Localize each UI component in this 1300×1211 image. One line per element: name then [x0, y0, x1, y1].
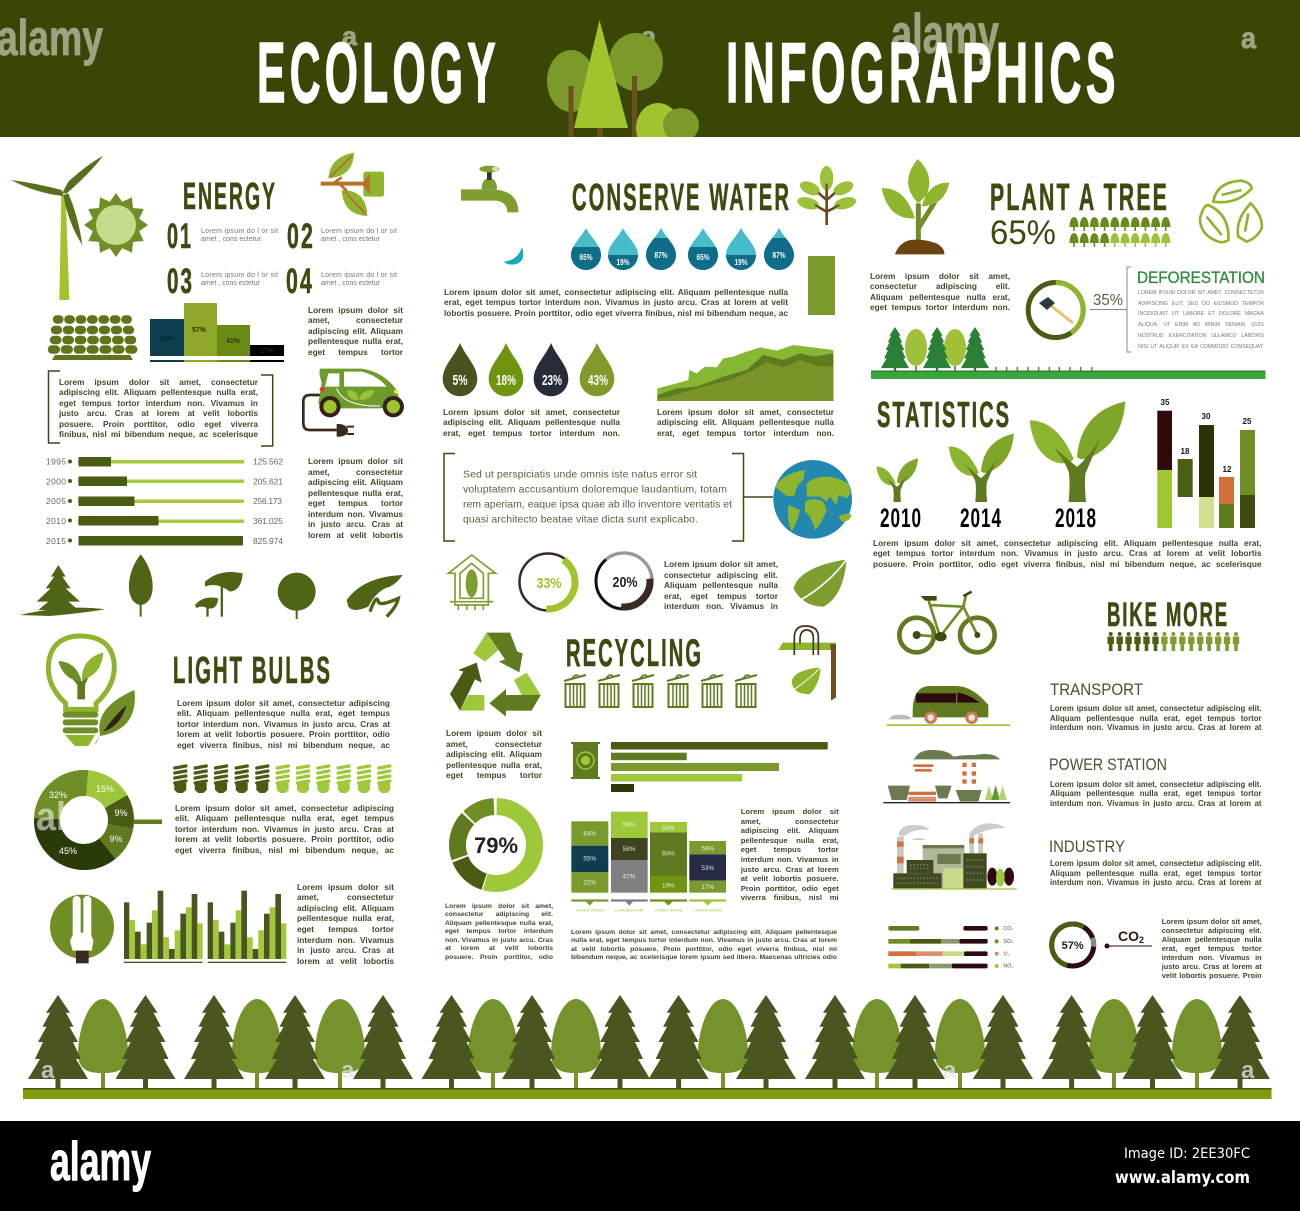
- stacked bar chart: 53%: [662, 825, 675, 832]
- chart: ring 57%: 57%: [1062, 940, 1084, 952]
- text block: Aliquam pellentesque nulla erat, eget tempus tortor: [1050, 789, 1262, 798]
- text block: amet, consectetur: [308, 315, 403, 325]
- text block: consectetur adipiscing elit.: [664, 570, 778, 580]
- stacked bar chart: 60%: [662, 850, 675, 857]
- panel: conserve water: [443, 166, 857, 620]
- text block: Lorem ipsum dolor sit: [308, 456, 403, 466]
- text block: [446, 728, 542, 783]
- panel: energy: [11, 153, 404, 619]
- text block: adipiscing elit. Aliquam pellentesque nulla: [443, 417, 620, 427]
- text block: Lorem ipsum dolor sit amet, consectetur: [443, 407, 620, 417]
- forest strip: a: [943, 1057, 957, 1084]
- text block: at velit lobortis posuere.: [741, 874, 839, 883]
- chart: small water drops: 65%: [696, 253, 710, 262]
- icon: recycling leaves: [1200, 181, 1262, 242]
- horizontal bars by year: 361.025: [253, 516, 283, 526]
- stacked bar chart: LOREM IPSUM: [576, 908, 604, 913]
- text block: interdum non. Vivamus in justo arcu. Cras at lorem at: [1050, 723, 1262, 732]
- bracket quote: Sed ut perspiciatis unde omnis iste natus error sit: [463, 468, 697, 480]
- text block: Lorem ipsum dolor sit amet,: [664, 559, 778, 569]
- numbered list: [167, 217, 397, 301]
- horizontal bars by year: 256.173: [253, 496, 282, 506]
- stacked bar chart: 59%: [623, 822, 636, 829]
- text block: velit lobortis posuere. Proin: [1162, 971, 1262, 980]
- area chart: [657, 345, 833, 401]
- text block: lorem at velit lobortis: [308, 530, 403, 540]
- text block: interdum non. Vivamus in: [741, 855, 839, 864]
- stacked bar chart: 19%: [662, 882, 675, 889]
- text block: justo arcu. Cras at lorem at: [1162, 962, 1262, 971]
- numbered list: amet , cons ectetur: [201, 280, 261, 287]
- stacked bar chart: 64%: [583, 831, 596, 838]
- text block: Aliquam pellentesque nulla: [664, 580, 778, 590]
- text block: interdum non. Vivamus in justo arcu. Cras at lorem at: [1050, 878, 1262, 887]
- numbered list: Lorem ipsum do l or sit: [201, 228, 278, 235]
- chart: donut: 32%: [49, 790, 67, 800]
- horizontal bars by year: 1995: [46, 456, 66, 466]
- label: CO2 with connector: [1104, 928, 1152, 948]
- numbered list: Lorem ipsum do l or sit: [201, 272, 278, 279]
- chart: emissions bars: NO₂: [1003, 964, 1014, 970]
- text block: adipiscing elit. Aliquam: [446, 749, 542, 759]
- icon: barrel: [571, 742, 600, 779]
- text block: amet, consectetur: [297, 892, 394, 902]
- stacked bar chart: [571, 812, 726, 913]
- text block: erat, eget tempus tortor interdum non. Vivamus in justo arcu. Cras at lorem at velit: [444, 297, 788, 307]
- numbered list: 03: [167, 262, 194, 301]
- text block: pellentesque nulla erat,: [741, 836, 839, 845]
- stacked bar chart: LOREM IPSUM: [694, 908, 722, 913]
- text block: [664, 559, 778, 614]
- text block: adipiscing elit. Aliquam: [308, 326, 403, 336]
- text block: in justo arcu. Cras at: [297, 945, 394, 955]
- heading: transport: TRANSPORT: [1050, 680, 1143, 699]
- text block: consectetur adipiscing elit.: [1162, 926, 1262, 935]
- chart: small water drops: 19%: [616, 258, 630, 267]
- text block: Lorem ipsum dolor sit amet, consectetur: [657, 407, 834, 417]
- numbered list: 01: [167, 217, 193, 256]
- deforestation text: NISI UT ALIQUIP EX EA COMMODO CONSEQUAT.: [1138, 344, 1264, 350]
- bracket quote: rem aperiam, eaque ipsa quae ab illo inventore veritatis et: [463, 498, 732, 510]
- numbered list: 02: [287, 217, 315, 256]
- deforestation text: LOREM IPSUM DOLOR SIT AMET, CONSECTETUR: [1138, 290, 1264, 296]
- deforestation text: ADIPISCING ELIT, SED DO EIUSMOD TEMPOR: [1138, 301, 1264, 307]
- bracket text: justo arcu. Cras at lorem at velit lobortis: [59, 408, 258, 418]
- stacked bar chart: 47%: [623, 874, 636, 881]
- stacked bar chart: 59%: [701, 845, 714, 852]
- chart: donut: al: [36, 795, 66, 839]
- icon: factory: [892, 823, 1017, 890]
- icons: tree silhouettes: [20, 554, 403, 619]
- watermark top: alamy: [0, 10, 103, 66]
- heading: conserve water: CONSERVE WATER: [572, 177, 791, 219]
- chart: big drops: 18%: [496, 372, 516, 389]
- text block: Aliquam pellentesque nulla: [1162, 935, 1262, 944]
- chart: emissions bars: [888, 926, 1014, 970]
- text block: adipiscing elit. Aliquam: [308, 477, 403, 487]
- chart: emissions bars: O₃: [1003, 951, 1010, 957]
- text block: interdum non. Vivamus in: [664, 601, 778, 611]
- text block: Lorem ipsum dolor sit amet, consectetur adipiscing elit. Aliquam pellentesque: [571, 929, 837, 936]
- icon: wind turbine: [11, 156, 103, 300]
- label: CO2 with connector: 2: [1139, 935, 1144, 945]
- icon: eco house: [448, 555, 496, 610]
- text block: Lorem ipsum dolor sit: [741, 807, 839, 816]
- horizontal bars by year: 2005: [46, 496, 66, 506]
- panel: recycling: [442, 626, 839, 965]
- chart: big drops: 23%: [542, 372, 562, 389]
- numbered list: amet , cons ectetur: [201, 236, 262, 243]
- text block: eget viverra finibus, nisl mi bibendum neque, ac: [177, 740, 390, 750]
- text block: Aliquam pellentesque nulla erat, eget tempus tortor: [1050, 714, 1262, 723]
- text block: lorem at velit lobortis: [297, 956, 394, 966]
- bar chart: statistics: 18: [1181, 447, 1190, 456]
- horizontal bars by year: 2010: [46, 516, 66, 526]
- text block: [1050, 859, 1262, 889]
- text block: at velit lobortis posuere. Proin porttitor, odio eget viverra finibus, nisl mi: [571, 946, 837, 953]
- text block: nulla erat, eget tempus tortor interdum non. Vivamus in justo arcu. Cras at lorem: [571, 937, 837, 944]
- bar charts: [124, 891, 286, 963]
- pictogram: bins: [564, 675, 757, 707]
- heading: deforestation: DEFORESTATION: [1137, 268, 1265, 287]
- text block: [1050, 780, 1262, 810]
- stacked bar chart: LOREM IPSUM: [615, 908, 643, 913]
- stat: 35% with connector: 35%: [1093, 292, 1123, 309]
- icon: branch with leaves: [321, 153, 384, 216]
- chart: small water drops: [571, 228, 794, 270]
- panel: light bulbs: [32, 636, 394, 968]
- text block: erat, eget tempus tortor interdum non.: [657, 428, 834, 438]
- text block: Lorem ipsum dolor sit amet,: [1162, 917, 1262, 926]
- chart: big drops: 5%: [452, 372, 468, 389]
- chart: donut: 9%: [109, 834, 123, 844]
- deforestation text: ALIQUA. UT ENIM AD MINIM VENIAM, QUIS: [1138, 322, 1264, 328]
- chart: donut 79%: [442, 791, 550, 899]
- text block: [445, 903, 553, 965]
- chart: donut: 15%: [96, 784, 114, 794]
- icon: water crescent: [504, 247, 523, 265]
- text block: consectetur adipiscing elit.: [445, 911, 553, 918]
- heading: statistics: STATISTICS: [877, 394, 1011, 435]
- chart: emissions bars: CO₂: [1003, 926, 1014, 932]
- chart: small water drops: 19%: [734, 258, 748, 267]
- watermark top: a: [641, 21, 656, 52]
- bracket text: finibus, nisl mi bibendum neque, ac scelerisque: [59, 429, 258, 439]
- text block: Lorem ipsum dolor sit amet,: [870, 271, 1010, 281]
- bracket quote: quasi architecto beatae vitae dicta sunt explicabo.: [463, 514, 698, 526]
- chart: donut: 45%: [59, 846, 77, 856]
- chart: big drops: 43%: [588, 372, 608, 389]
- text block: lorem at velit lobortis posuere. Proin porttitor, odio: [175, 834, 394, 844]
- icon: leaf: [793, 559, 847, 607]
- text block: Lorem ipsum dolor sit amet, consectetur adipiscing: [177, 698, 390, 708]
- chart: small water drops: 87%: [654, 251, 668, 260]
- heading: light bulbs: LIGHT BULBS: [173, 650, 332, 692]
- bracket quote: [48, 371, 273, 446]
- text block: Lorem ipsum dolor sit amet, consectetur adipiscing elit. Aliquam pellentesque nulla: [444, 286, 788, 296]
- text block: adipiscing elit. Aliquam: [297, 903, 394, 913]
- stat: 65%: 65%: [990, 214, 1056, 252]
- bar chart: energy share: 41%: [226, 338, 241, 345]
- chart: ring 33%: 33%: [536, 575, 562, 592]
- text block: amet, consectetur: [741, 817, 839, 826]
- green rectangle: [808, 256, 835, 315]
- horizontal bars by year: 2015: [46, 536, 66, 546]
- numbered list: Lorem ipsum do l or sit: [321, 272, 397, 279]
- text block: Lorem ipsum dolor sit amet, consectetur adipiscing elit.: [1050, 704, 1262, 713]
- sprout 2010: 2010: [880, 503, 922, 533]
- bar chart: statistics: [1157, 398, 1255, 528]
- text block: [571, 929, 837, 965]
- text block: at lorem at velit lobortis: [445, 945, 553, 952]
- illustration: forest and stumps: [871, 327, 1266, 379]
- chart: ring 20%: [585, 542, 663, 620]
- text block: [443, 407, 620, 441]
- stacked bar chart: 53%: [701, 865, 714, 872]
- text block: erat, eget tempus tortor interdum non.: [443, 428, 620, 438]
- text block: interdum non. Vivamus: [308, 508, 403, 518]
- sprout 2010: [876, 458, 922, 533]
- watermark top: alamy: [891, 2, 999, 65]
- stacked bar chart: 58%: [623, 846, 636, 853]
- bar chart: statistics: 25: [1243, 417, 1252, 426]
- icon: branch: [796, 166, 857, 225]
- bar chart: statistics: 30: [1202, 412, 1211, 421]
- text block: eget tempus tortor: [446, 770, 542, 780]
- website: www.alamy.com: [1115, 1168, 1250, 1188]
- text block: Lorem ipsum dolor sit: [446, 728, 542, 738]
- bar chart: statistics: 12: [1223, 465, 1232, 474]
- text block: eget tempus tortor interdum non. Vivamus in justo arcu. Cras at lorem at velit lobortis: [873, 548, 1262, 558]
- bracket text: adipiscing elit. Aliquam pellentesque nulla erat,: [59, 387, 258, 397]
- text block: Lorem ipsum dolor sit amet, consectetur adipiscing elit.: [1050, 859, 1262, 868]
- deforestation text: NOSTRUD EXERCITATION ULLAMCO LABORIS: [1138, 333, 1264, 339]
- text block: Aliquam pellentesque nulla erat,: [445, 920, 553, 927]
- text block: [444, 286, 788, 320]
- image id: Image ID: 2EE30FC: [1124, 1146, 1250, 1162]
- bracket text: posuere. Proin porttitor, odio eget viverra: [59, 418, 258, 428]
- text block: eget tempus tortor: [297, 924, 394, 934]
- text block: non. Vivamus in justo arcu. Cras: [445, 937, 553, 944]
- sprout 2018: 2018: [1055, 503, 1097, 533]
- icon: faucet: [461, 166, 518, 212]
- chart: donut: [32, 768, 162, 872]
- text block: justo arcu. Cras at lorem: [741, 865, 839, 874]
- sprout 2014: [949, 433, 1014, 533]
- icon: electric car: [303, 369, 404, 437]
- text block: [657, 407, 834, 441]
- icon: shopping bag: [778, 626, 836, 701]
- text block: posuere. Proin porttitor, odio: [445, 954, 553, 961]
- sprout 2014: 2014: [960, 503, 1002, 533]
- text block: Lorem ipsum dolor sit: [297, 882, 394, 892]
- watermark top: a: [1241, 22, 1256, 55]
- text block: pellentesque nulla erat,: [297, 913, 394, 923]
- icon: sprout: [882, 159, 949, 254]
- text block: eget tempus tortor: [741, 845, 839, 854]
- icon: power station: [883, 750, 1010, 803]
- text block: eget viverra finibus, nisl mi bibendum neque, ac: [175, 845, 394, 855]
- deforestation text: [1138, 288, 1264, 354]
- chart: small water drops: 87%: [772, 251, 786, 260]
- text block: [177, 698, 390, 752]
- text block: pellentesque nulla erat,: [308, 336, 403, 346]
- sprout 2018: [1030, 401, 1125, 533]
- numbered list: 04: [286, 262, 314, 301]
- heading: plant a tree: PLANT A TREE: [990, 177, 1169, 219]
- heading: energy: ENERGY: [183, 176, 277, 218]
- text block: eget tempus tortor interdum: [445, 928, 553, 935]
- stacked bar chart: 55%: [583, 856, 596, 863]
- text block: interdum non. Vivamus: [297, 935, 394, 945]
- numbered list: amet , cons ectetur: [321, 280, 381, 287]
- chart: deforestation ring with axe: [1028, 282, 1083, 338]
- chart: ring 57%: [1046, 918, 1100, 972]
- text block: [308, 305, 403, 361]
- text block: pellentesque nulla erat,: [308, 488, 403, 498]
- chart: donut 79%: 79%: [474, 833, 518, 858]
- stacked bar chart: LOREM IPSUM: [654, 908, 682, 913]
- pictogram: trees: [1070, 217, 1170, 247]
- text block: adipiscing elit. Aliquam pellentesque nulla: [657, 417, 834, 427]
- panel: plant a tree: [870, 159, 1266, 379]
- text block: tortor interdum non. Vivamus in justo arcu. Cras at: [175, 824, 394, 834]
- chart: small water drops: 65%: [580, 253, 592, 262]
- icon: bulb with sprout: [48, 636, 136, 746]
- text block: elit. Aliquam pellentesque nulla erat, eget tempus: [177, 708, 390, 718]
- watermark top: [0, 2, 1256, 66]
- text block: elit. Aliquam pellentesque nulla erat, eget tempus: [175, 813, 394, 823]
- icon: globe: [773, 460, 852, 539]
- text block: pellentesque nulla erat,: [446, 760, 542, 770]
- panel: statistics: [873, 394, 1262, 572]
- text block: posuere. Proin porttitor, odio eget viverra finibus, nisl mi bibendum neque, ac scelerisque: [873, 559, 1262, 569]
- text block: Lorem ipsum dolor sit amet, consectetur adipiscing elit. Aliquam pellentesque nulla erat,: [873, 538, 1262, 548]
- pictogram: people: [1108, 632, 1239, 651]
- pictogram: bulbs: [174, 766, 390, 793]
- deforestation text: INCIDIDUNT UT LABORE ET DOLORE MAGNA: [1138, 311, 1264, 317]
- footer bar: [0, 1121, 1300, 1211]
- text block: interdum non. Vivamus in: [1162, 953, 1262, 962]
- icon: van: [887, 686, 1010, 726]
- text block: [741, 807, 839, 905]
- text block: [308, 456, 403, 542]
- chart: ring 33%: [510, 544, 586, 620]
- icon: bulb circle: [50, 895, 114, 963]
- horizontal bars by year: [46, 456, 283, 546]
- text block: [175, 803, 394, 858]
- text block: viverra finibus, nisl mi: [741, 893, 839, 902]
- heading: recycling: RECYCLING: [566, 632, 703, 675]
- text block: eget tempus tortor interdum non.: [870, 302, 1010, 312]
- bar chart: statistics: 35: [1161, 398, 1170, 407]
- bar chart: energy share: 57%: [192, 327, 207, 334]
- forest strip: [23, 995, 1272, 1099]
- text block: Lorem ipsum dolor sit: [308, 305, 403, 315]
- stat: 35% with connector: [1090, 267, 1131, 352]
- icon: sun: [84, 193, 148, 257]
- header trees icon: [547, 20, 699, 137]
- bar chart: energy share: 17%: [260, 348, 275, 355]
- text block: bibendum neque, ac scelerisque lorem ipsum sed libero. Maecenas ultricies odio: [571, 954, 837, 961]
- text block: amet, consectetur: [446, 738, 542, 748]
- chart: emissions bars: SO₂: [1003, 939, 1014, 945]
- bracket text: eget tempus tortor interdum non. Vivamus in: [59, 398, 258, 408]
- stacked bar chart: 17%: [701, 884, 714, 891]
- text block: lorem at velit lobortis posuere. Proin porttitor, odio: [177, 729, 390, 739]
- icon: recycle arrows: [450, 633, 541, 717]
- stacked bar chart: 22%: [583, 880, 596, 887]
- panel: bike more: [883, 592, 1262, 982]
- text block: [873, 538, 1262, 572]
- forest strip: a: [41, 1057, 55, 1084]
- text block: interdum non. Vivamus in justo arcu. Cras at lorem at: [1050, 799, 1262, 808]
- text block: eget tempus tortor: [308, 498, 403, 508]
- horizontal bars by year: 2000: [46, 476, 66, 486]
- text block: lobortis posuere. Proin porttitor, odio eget viverra finibus, nisl mi bibendum neque, ac: [444, 308, 788, 318]
- header banner: [0, 0, 1300, 137]
- bracket quote: [444, 454, 773, 541]
- numbered list: amet , cons ectetur: [321, 236, 381, 243]
- text block: amet, consectetur: [308, 466, 403, 476]
- text block: erat, eget tempus tortor: [1162, 944, 1262, 953]
- text block: adipiscing elit. Aliquam: [741, 826, 839, 835]
- horizontal bars by year: 125.562: [253, 456, 283, 466]
- text block: eget tempus tortor: [308, 347, 403, 357]
- heading: industry: INDUSTRY: [1049, 837, 1125, 856]
- bracket text: [59, 376, 258, 442]
- bar chart: horizontal: [611, 742, 828, 792]
- text block: erat, eget tempus tortor: [664, 590, 778, 600]
- text block: Lorem ipsum dolor sit amet, consectetur adipiscing: [175, 803, 394, 813]
- text block: in justo arcu. Cras at: [308, 519, 403, 529]
- heading: power station: POWER STATION: [1049, 755, 1167, 774]
- text block: [1162, 918, 1262, 982]
- horizontal bars by year: 825.974: [253, 536, 283, 546]
- text block: Aliquam pellentesque nulla erat, eget tempus tortor: [1050, 869, 1262, 878]
- watermark top: a: [342, 21, 358, 51]
- text block: [297, 882, 394, 968]
- text block: consectetur adipiscing elit.: [870, 281, 1010, 291]
- text block: [1050, 704, 1262, 734]
- chart: donut: 9%: [114, 808, 128, 818]
- text block: Aliquam pellentesque nulla erat,: [870, 292, 1010, 302]
- logo: alamy: alamy: [50, 1130, 151, 1192]
- icon: solar panel: [52, 320, 134, 360]
- title: ecology: ECOLOGY: [257, 26, 500, 121]
- bar chart: energy share: 46%: [160, 336, 175, 343]
- forest strip: a: [341, 1057, 355, 1084]
- chart: ring 20%: 20%: [612, 574, 638, 591]
- text block: Lorem ipsum dolor sit amet, consectetur adipiscing elit.: [1050, 780, 1262, 789]
- forest strip: a: [1241, 1057, 1255, 1084]
- icon: bicycle: [899, 592, 995, 652]
- text block: [870, 271, 1010, 315]
- text block: Lorem ipsum dolor sit amet,: [445, 903, 553, 910]
- horizontal bars by year: 205.621: [253, 476, 283, 486]
- bar chart: energy share: [150, 303, 284, 362]
- bracket text: Lorem ipsum dolor sit amet, consectetur: [59, 376, 258, 386]
- chart: big drops: [443, 343, 614, 396]
- text block: tortor interdum non. Vivamus in justo arcu. Cras at: [177, 718, 390, 728]
- bracket quote: voluptatem accusantium doloremque laudantium, totam: [463, 484, 727, 496]
- label: CO2 with connector: CO: [1118, 928, 1139, 944]
- text block: Proin porttitor, odio eget: [741, 884, 839, 893]
- numbered list: Lorem ipsum do l or sit: [321, 228, 397, 235]
